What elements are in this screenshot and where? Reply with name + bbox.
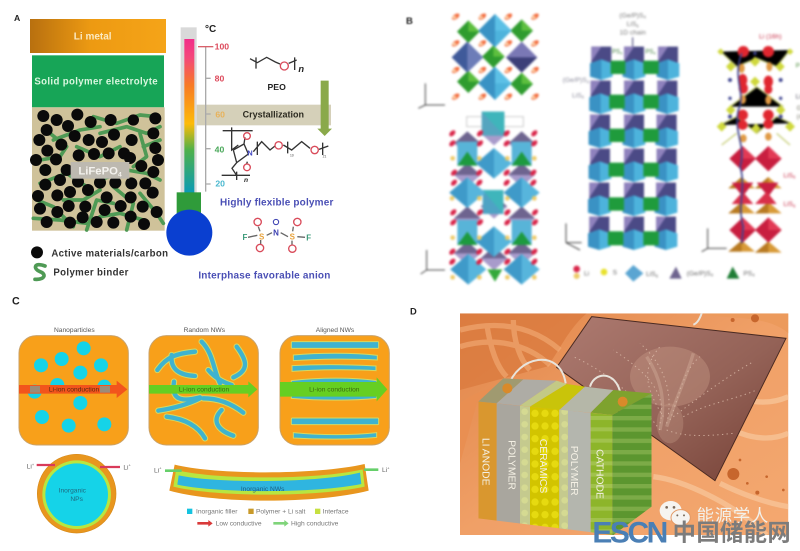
crystal legend: (Ge/P)S	[687, 270, 711, 277]
legend: polymer binder: Polymer binder	[53, 268, 129, 279]
copolymer structure: 10	[290, 154, 294, 158]
battery layer labels: CERAMICS	[537, 439, 548, 493]
watermark: ESCN	[592, 517, 668, 550]
battery layer labels: POLYMER	[568, 446, 579, 496]
framework labels: LiS	[783, 201, 793, 208]
panel B: crystal structures	[418, 12, 800, 285]
side view crystal	[448, 112, 540, 285]
panel label D: D	[410, 307, 417, 317]
conduction legend: High conductive	[291, 520, 339, 527]
random nanowires panel: Li-ion conduction	[179, 387, 229, 394]
nanowire interface diagram: +	[387, 465, 390, 470]
legend Li: Li	[584, 270, 590, 277]
FSI anion structure: F	[243, 233, 248, 242]
nanoparticle interface diagram: Li	[27, 464, 32, 471]
central chain structure	[588, 12, 800, 282]
battery front face	[478, 393, 652, 537]
LiFePO4 electrode	[30, 107, 165, 231]
chain labels: (Ge/P)S	[619, 12, 643, 19]
solid polymer electrolyte layer	[32, 55, 164, 107]
temperature scale: °C	[205, 24, 216, 35]
1D chains: 4	[620, 50, 623, 55]
nanoparticles panel: Nanoparticles	[54, 327, 95, 334]
1D chains: PS	[612, 49, 620, 55]
watermark: 能源学人	[697, 506, 768, 526]
nanowire interface diagram: +	[159, 466, 162, 471]
panel D: hybrid battery illustration	[410, 307, 791, 550]
PEO structure: n	[298, 64, 304, 74]
nanowire interface diagram: Inorganic NWs	[241, 486, 285, 493]
battery top face	[478, 378, 652, 415]
framework labels: 6	[793, 203, 796, 208]
chain labels: 6	[636, 23, 639, 28]
FSI anion structure: N	[273, 228, 279, 237]
crystal legend	[601, 265, 755, 282]
battery layer labels: CATHODE	[594, 449, 605, 499]
aligned nanowires panel: Aligned NWs	[316, 327, 355, 334]
legend: polymer binder	[35, 265, 129, 279]
panel label B: B	[406, 16, 413, 27]
nanowire interface diagram: Li	[154, 467, 159, 474]
chain labels: 6	[582, 95, 585, 100]
1D chains: 4	[653, 50, 656, 55]
top view crystal	[451, 12, 540, 101]
orange background	[460, 313, 788, 535]
nanoparticle interface diagram: +	[32, 462, 35, 467]
chain labels: 1D chain	[620, 30, 646, 37]
framework labels: 6	[793, 175, 796, 180]
FSI anion structure: F	[306, 234, 311, 243]
battery layer labels: POLYMER	[505, 440, 516, 490]
connector wires	[508, 313, 702, 402]
panel label A: A	[14, 13, 21, 23]
nanoparticles panel: Li-ion conduction	[49, 387, 99, 394]
1D chains	[588, 47, 679, 250]
solid polymer electrolyte layer: Solid polymer electrolyte	[34, 77, 158, 88]
label: interphase favorable anion: Interphase favorable anion	[198, 270, 330, 281]
FSI anion structure: S	[290, 232, 296, 241]
watermark: 中国储能网	[673, 520, 791, 546]
axes	[702, 228, 727, 252]
nanoparticles panel	[19, 327, 128, 445]
crystallization band	[197, 105, 331, 125]
battery terminals	[502, 383, 628, 407]
conduction legend: Polymer + Li salt	[256, 509, 306, 516]
conduction legend	[187, 509, 349, 527]
copolymer structure: 21	[323, 154, 327, 158]
conduction legend: Low conductive	[216, 520, 262, 527]
axes	[418, 83, 582, 274]
chain labels: LiS	[572, 92, 582, 99]
FSI anion structure: S	[259, 232, 265, 241]
watermark	[592, 501, 791, 550]
Li metal layer	[30, 19, 166, 53]
panel A: polymer electrolyte cell	[14, 13, 168, 279]
nanoparticle interface diagram	[27, 454, 132, 533]
FSI anion structure	[243, 218, 311, 252]
thermometer and polymer chemistry	[166, 24, 333, 281]
copolymer structure	[222, 127, 328, 184]
temperature scale: 40	[215, 144, 224, 154]
nanoparticle interface diagram: +	[129, 463, 132, 468]
crystal structures left column	[418, 12, 590, 285]
1D chains: PS	[645, 49, 653, 55]
aligned nanowires panel: Li-ion conduction	[309, 387, 360, 394]
crystal legend: PS	[743, 270, 752, 277]
nanowire interface diagram: Li	[382, 467, 387, 474]
PEO structure	[250, 57, 304, 92]
panel C: nanowire conduction	[12, 296, 390, 533]
legend: active materials: Active materials/carbon	[51, 248, 168, 259]
conduction legend: Interface	[323, 509, 349, 516]
chain labels: 4	[643, 15, 646, 20]
LiFePO4 electrode: LiFePO	[78, 166, 118, 178]
conduction legend: Inorganic filler	[196, 509, 238, 516]
copolymer structure: n	[244, 177, 248, 184]
atomic framework structure	[717, 46, 795, 253]
Li metal layer: Li metal	[74, 32, 112, 43]
temperature scale: 80	[215, 74, 224, 84]
circuit plate	[557, 317, 786, 481]
framework labels	[759, 34, 800, 208]
LiFePO4 electrode: 4	[118, 172, 122, 179]
chain labels	[563, 77, 590, 100]
PEO structure: PEO	[268, 82, 286, 92]
crystal legend: 4	[711, 273, 714, 278]
temperature scale: 20	[215, 179, 225, 189]
chain labels	[619, 12, 646, 37]
temperature scale: 100	[215, 41, 229, 51]
label: highly flexible polymer: Highly flexible polymer	[220, 197, 333, 208]
nanoparticle interface diagram: Inorganic	[59, 487, 87, 494]
nanowire interface diagram	[154, 464, 390, 501]
framework labels: LiS	[783, 172, 793, 179]
copolymer structure: N	[247, 148, 253, 157]
chain labels: 4	[587, 79, 590, 84]
crystallization band: Crystallization	[243, 110, 304, 120]
cooling arrow	[317, 81, 332, 136]
chain labels: LiS	[627, 21, 636, 28]
nanoparticle interface diagram: NPs	[70, 496, 84, 503]
battery layer labels	[479, 438, 605, 499]
random nanowires panel: Random NWs	[184, 327, 226, 334]
crystal legend: LiS	[646, 271, 656, 278]
framework labels: Li (16h)	[759, 34, 782, 41]
chain labels: (Ge/P)S	[563, 77, 587, 84]
crystal legend: S	[613, 270, 618, 277]
temperature scale	[198, 24, 229, 192]
aligned nanowires panel	[280, 327, 389, 445]
random nanowires panel	[149, 327, 258, 445]
thermometer	[166, 27, 212, 256]
temperature scale: 60	[215, 110, 225, 120]
nanoparticle interface diagram: Li	[123, 464, 129, 471]
legend Li	[573, 266, 590, 279]
crystal legend: 6	[656, 273, 659, 278]
battery layer labels: LI ANODE	[479, 438, 490, 486]
panel label C: C	[12, 296, 20, 308]
crystal legend: 4	[752, 273, 755, 278]
